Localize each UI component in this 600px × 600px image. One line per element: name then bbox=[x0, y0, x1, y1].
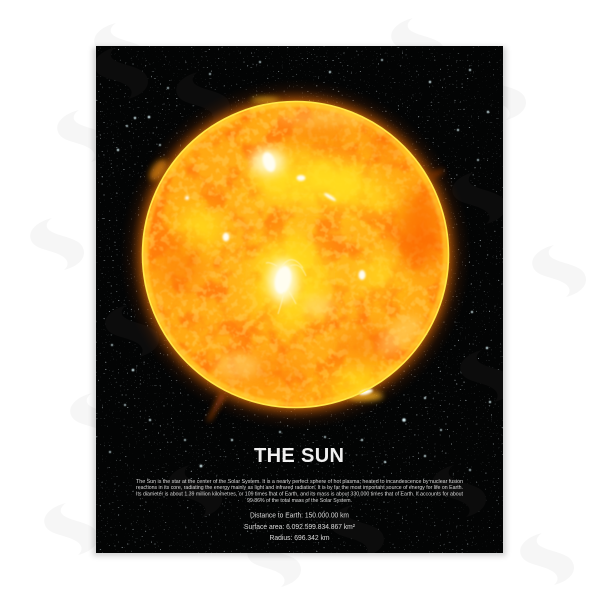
poster panel bbox=[94, 46, 514, 557]
title: THE SUN bbox=[254, 445, 344, 467]
corona glow bbox=[120, 78, 472, 430]
description text: The Sun is the star at the center of the Solar System. It is a nearly perfect sphere of hot plasma, heated to incandescence by nuclear fusion bbox=[136, 479, 463, 485]
pale limb regions bbox=[216, 110, 428, 378]
poster shadow bbox=[93, 47, 506, 556]
radius: Radius: 696.342 km bbox=[270, 533, 330, 542]
surface area: Surface area: 6.092.599.834.867 km² bbox=[244, 522, 356, 531]
bright rim bbox=[142, 102, 448, 408]
photosphere bbox=[142, 101, 449, 408]
description text: 99.86% of the total mass of the Solar System. bbox=[247, 498, 352, 504]
yellow active regions bbox=[178, 154, 405, 399]
description text: Its diameter is about 1.39 million kilometres, or 109 times that of Earth, and its mass is about 330,000 times that of Earth. It accounts for about bbox=[136, 492, 464, 498]
star field texture bbox=[96, 46, 503, 553]
description text: reactions in its core, radiating the energy mainly as light and infrared radiation. It is by far the most important source of energy for life on Earth. bbox=[136, 485, 463, 491]
limb brightening bbox=[146, 104, 446, 404]
space background bbox=[96, 46, 503, 553]
description text bbox=[136, 479, 464, 504]
upper flare bbox=[251, 148, 285, 176]
dark orange mottling bbox=[142, 101, 449, 408]
small bright spots bbox=[222, 232, 230, 242]
red-orange regions bbox=[156, 120, 444, 388]
central flare bbox=[266, 259, 306, 314]
distance to Earth: Distance to Earth: 150.000.00 km bbox=[250, 510, 349, 520]
sun bbox=[120, 78, 472, 430]
flares around the limb bbox=[146, 98, 445, 421]
pale granulation bbox=[142, 101, 449, 408]
bright stars bbox=[109, 59, 495, 471]
white solar flares bbox=[185, 148, 373, 396]
faint watermark logos on poster bbox=[94, 47, 514, 557]
facts list bbox=[244, 512, 355, 540]
